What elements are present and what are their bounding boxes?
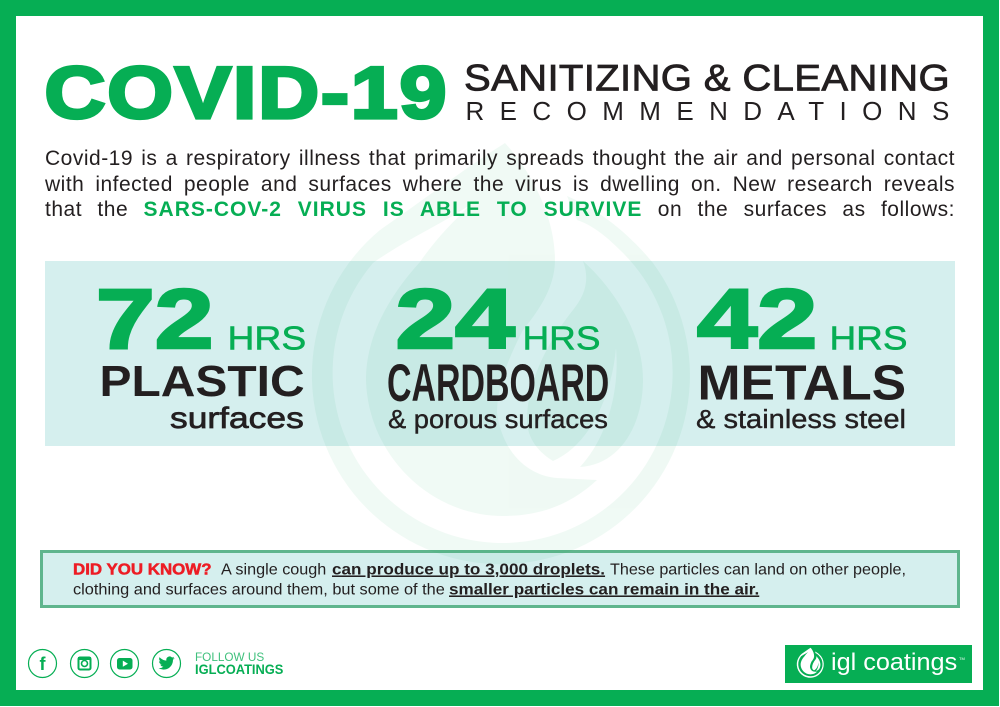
stat: 24 hours cardboard: & porous surfaces [388,405,608,434]
callout text: did you know: can produce up to 3,000 droplets. [332,561,605,578]
social handle: follow us [195,650,283,677]
stat: 42 hours metals: & stainless steel [696,404,906,434]
icon: youtube [110,650,138,678]
intro paragraph: Covid-19 is a respiratory illness that primarily spreads thought the air and personal contact [45,147,955,170]
stat: 42 hours metals: HRS [830,320,907,357]
callout text: did you know: clothing and surfaces around them, but some of the [73,582,445,598]
stat: 24 hours cardboard [387,273,609,434]
social handle: follow us: IGLCOATINGS [195,662,283,677]
callout text: did you know: DID YOU KNOW? [73,561,212,578]
icon: facebook: f [40,654,46,674]
logo: igl coatings: igl coatings [831,648,957,676]
heading: sanitizing and cleaning: SANITIZING & CLEANING [464,58,950,99]
icon: facebook [28,650,56,678]
stat: 24 hours cardboard: HRS [522,320,600,357]
subheading: recommendations: RECOMMENDATIONS [466,96,965,126]
logo: igl coatings [785,645,972,683]
stat: 72 hours plastic: surfaces [170,402,304,434]
stat: 72 hours plastic: PLASTIC [100,356,305,406]
logo: igl coatings: TM [959,656,965,661]
callout text: did you know: These particles can land on other people, [610,562,906,578]
stat: 42 hours metals: 42 [697,272,817,366]
icon: twitter [152,650,180,678]
stat: 42 hours metals: METALS [698,355,906,410]
title: COVID-19: COVID-19 [44,52,448,134]
panel: did you know box [42,552,958,606]
stat: 24 hours cardboard: CARDBOARD [387,355,609,413]
stat: 72 hours plastic: HRS [228,320,306,357]
intro paragraph: that the SARS-COV-2 VIRUS IS ABLE TO SURVIVE on the surfaces as follows: [45,198,955,221]
callout text: did you know: smaller particles can remain in the air. [449,581,759,598]
intro paragraph [45,147,955,221]
icon: instagram [70,650,98,678]
panel: survival times background [45,261,955,446]
stat: 42 hours metals [696,272,907,434]
callout text: did you know: A single cough [221,562,326,578]
stat: 24 hours cardboard: 24 [396,273,515,366]
watermark: igl coatings logo [312,143,690,564]
callout text: did you know [73,561,906,598]
intro paragraph: with infected people and surfaces where the virus is dwelling on. New research reveals [45,173,955,196]
social handle: follow us: FOLLOW US [195,650,264,664]
stat: 72 hours plastic [96,273,306,434]
stat: 72 hours plastic: 72 [96,273,214,366]
